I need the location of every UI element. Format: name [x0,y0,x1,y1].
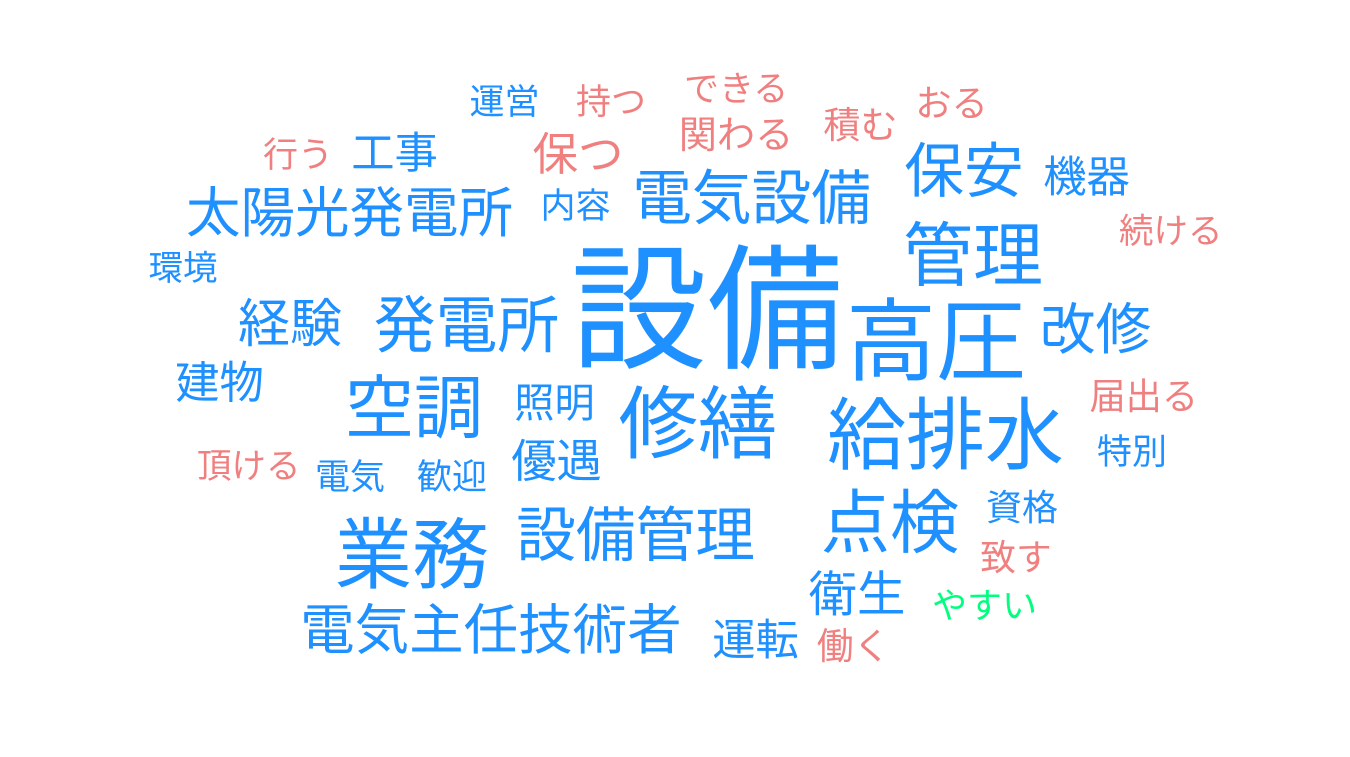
word: 環境: 環境 [148,250,218,288]
word: 資格: 資格 [986,486,1058,528]
word: できる: できる [684,70,788,109]
word: 衛生: 衛生 [809,568,905,622]
word: 工事: 工事 [351,130,438,178]
word: 設備管理: 設備管理 [516,502,755,569]
word: 照明: 照明 [514,381,595,426]
word: 給排水: 給排水 [827,392,1064,480]
word: 発電所: 発電所 [374,292,559,361]
word: 電気設備: 電気設備 [632,165,871,232]
word: 建物: 建物 [175,359,264,408]
word: 積む: 積む [823,104,898,146]
word: 致す: 致す [980,538,1052,578]
word: 運転: 運転 [712,617,799,665]
word: 空調: 空調 [345,370,483,447]
word: 続ける: 続ける [1119,212,1222,250]
word: 持つ: 持つ [576,82,646,122]
word: 改修: 改修 [1040,299,1151,361]
word: 太陽光発電所: 太陽光発電所 [186,183,513,244]
word: 関わる: 関わる [679,114,793,157]
word: 経験: 経験 [238,296,342,354]
word: 届出る: 届出る [1090,376,1198,417]
word: 優遇: 優遇 [511,436,602,487]
word: 高圧: 高圧 [846,293,1026,393]
word: 管理: 管理 [903,217,1043,295]
word: 機器: 機器 [1043,154,1130,202]
word: 保つ: 保つ [532,128,624,180]
word: 行う: 行う [263,136,333,175]
word: 頂ける: 頂ける [197,448,300,486]
word: おる: おる [915,83,988,124]
word: やすい: やすい [932,586,1037,626]
word: 点検: 点検 [821,484,959,562]
word: 働く: 働く [817,626,890,667]
word: 内容: 内容 [540,186,611,226]
word: 修繕: 修繕 [618,380,778,468]
word: 設備: 設備 [571,235,843,387]
word: 歓迎: 歓迎 [417,458,487,496]
word: 特別: 特別 [1097,432,1167,472]
word: 運営: 運営 [470,82,540,122]
word: 電気: 電気 [315,458,385,496]
word: 電気主任技術者: 電気主任技術者 [300,600,682,661]
word: 業務: 業務 [335,513,489,599]
word: 保安: 保安 [904,138,1024,205]
